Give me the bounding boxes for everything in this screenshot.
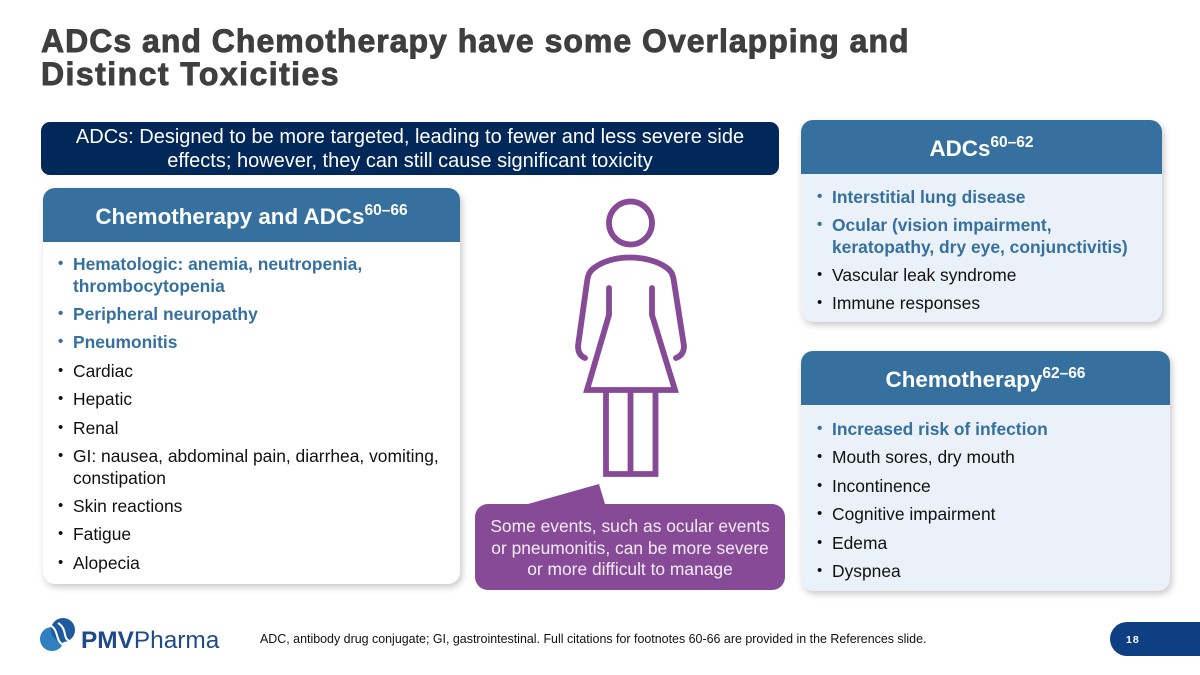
list item: Hematologic: anemia, neutropenia, bbox=[73, 254, 362, 274]
list item: Pneumonitis bbox=[73, 332, 177, 352]
list item: Vascular leak syndrome bbox=[832, 265, 1016, 285]
list item: constipation bbox=[73, 468, 166, 488]
logo: PMV Pharma: PMVPharma bbox=[81, 627, 219, 654]
list item: Skin reactions bbox=[73, 496, 182, 516]
heading: ADCs: ADCs60–62 bbox=[929, 134, 1034, 161]
heading: chemotherapy and ADCs bbox=[43, 188, 460, 242]
callout: some events: Some events, such as ocular events bbox=[490, 516, 770, 536]
list item: Hepatic bbox=[73, 389, 132, 409]
list item: Ocular (vision impairment, bbox=[832, 215, 1052, 235]
list item: Renal bbox=[73, 418, 118, 438]
list item: Increased risk of infection bbox=[832, 419, 1048, 439]
list item: Dyspnea bbox=[832, 561, 901, 581]
list item: keratopathy, dry eye, conjunctivitis) bbox=[832, 237, 1128, 257]
list item: Peripheral neuropathy bbox=[73, 304, 258, 324]
callout: some events: or more difficult to manage bbox=[527, 559, 733, 579]
list item bbox=[832, 214, 1128, 258]
list item: Fatigue bbox=[73, 524, 131, 544]
callout: ADCs designed to be more targeted bbox=[41, 122, 779, 175]
list item: Cardiac bbox=[73, 361, 133, 381]
panel: ADCs bbox=[801, 120, 1162, 322]
icon: female figure bbox=[575, 198, 687, 477]
list item: thrombocytopenia bbox=[73, 276, 225, 296]
heading: chemotherapy bbox=[801, 351, 1170, 405]
panel: chemotherapy bbox=[801, 351, 1170, 591]
callout: some events bbox=[475, 484, 785, 590]
heading: ADCs bbox=[801, 120, 1162, 174]
footnote: ADC, antibody drug conjugate; GI, gastrointestinal. Full citations for footnotes 60-66 are provided in the References slide. bbox=[260, 632, 926, 646]
list item bbox=[73, 253, 362, 297]
list item: Cognitive impairment bbox=[832, 504, 996, 524]
heading: chemotherapy: Chemotherapy62–66 bbox=[886, 365, 1085, 392]
list item: Immune responses bbox=[832, 293, 980, 313]
callout: ADCs designed to be more targeted: ADCs: Designed to be more targeted, leading to fewer and less severe side bbox=[76, 126, 744, 148]
list item bbox=[73, 445, 439, 489]
page number: 18 bbox=[1126, 634, 1140, 646]
title: ADCs and Chemotherapy have some Overlapping and bbox=[41, 23, 910, 59]
logo: PMV Pharma bbox=[40, 618, 220, 654]
callout: some events: or pneumonitis, can be more severe bbox=[491, 538, 769, 558]
list item: Incontinence bbox=[832, 476, 931, 496]
panel: chemotherapy and ADCs bbox=[43, 188, 460, 584]
page number bbox=[1110, 622, 1200, 656]
list item: Edema bbox=[832, 533, 887, 553]
heading: chemotherapy and ADCs: Chemotherapy and ADCs60–66 bbox=[95, 202, 408, 229]
list item: GI: nausea, abdominal pain, diarrhea, vomiting, bbox=[73, 446, 439, 466]
list item: Alopecia bbox=[73, 553, 140, 573]
list item: Interstitial lung disease bbox=[832, 187, 1025, 207]
title bbox=[41, 23, 910, 92]
title: Distinct Toxicities bbox=[41, 56, 340, 92]
list item: Mouth sores, dry mouth bbox=[832, 447, 1015, 467]
callout: ADCs designed to be more targeted: effects; however, they can still cause significant toxicity bbox=[167, 150, 653, 172]
